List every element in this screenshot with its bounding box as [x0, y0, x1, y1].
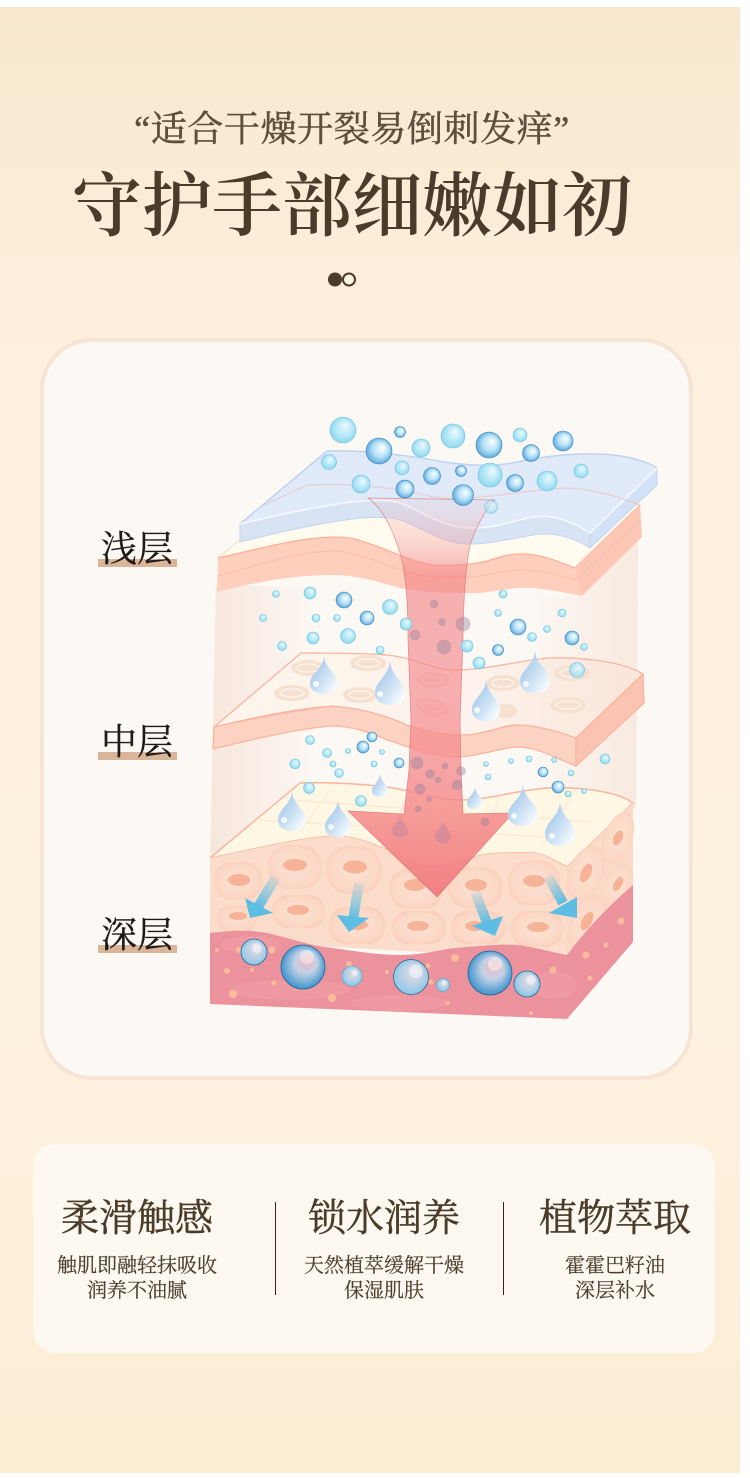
bubbles: dermis: [241, 939, 540, 997]
benefit: lock moisture: 天然植萃缓解干燥: [304, 1254, 464, 1277]
benefit: plant extract: 植物萃取: [539, 1198, 691, 1240]
blue arrows: [245, 876, 577, 936]
benefit: lock moisture: 锁水润养: [308, 1198, 460, 1240]
label: shallow layer: 浅层: [101, 529, 173, 569]
cell wall side: [567, 803, 633, 960]
skin diagram: [210, 417, 657, 1019]
subtitle: “适合干燥开裂易倒刺发痒”: [134, 109, 570, 149]
fading side walls: [210, 540, 638, 862]
middle layer: [213, 653, 644, 766]
bubbles: middle: [260, 587, 588, 678]
benefit: plant extract: 霍霍巴籽油: [565, 1254, 665, 1277]
arrow 3: [472, 892, 503, 936]
pagination dots: [328, 272, 355, 286]
arrow: penetration downward: [348, 498, 513, 897]
divider: [503, 1202, 504, 1295]
shallow layer: [217, 485, 642, 596]
cell wall front: [210, 836, 567, 960]
water droplets: [278, 651, 575, 846]
benefit: soft touch: 润养不油腻: [87, 1279, 187, 1302]
arrow 1: [245, 877, 276, 918]
benefit: soft touch: 触肌即融轻抹吸收: [57, 1254, 217, 1277]
divider: [275, 1202, 276, 1295]
blue moisture film: [240, 451, 657, 548]
cells: [214, 808, 640, 957]
dermis texture: [220, 936, 577, 1011]
benefit: lock moisture: 保湿肌肤: [344, 1279, 424, 1302]
benefit: plant extract: 深层补水: [575, 1279, 655, 1302]
dermis spots: [215, 918, 624, 1015]
benefit: lock moisture: [304, 1198, 464, 1302]
arrow 2: [337, 883, 369, 932]
benefit: soft touch: [57, 1198, 217, 1302]
label: deep layer: 深层: [101, 915, 173, 955]
arrow 4: [548, 876, 577, 918]
title: 守护手部细嫩如初: [72, 169, 632, 246]
bubbles: top: [322, 417, 588, 514]
dermis: [210, 885, 633, 1019]
panel: benefits: [33, 1144, 715, 1353]
label: middle layer: 中层: [101, 722, 173, 762]
surface ovals: [274, 655, 590, 720]
bubbles: lower: [290, 732, 610, 826]
deep layer block: [210, 783, 640, 1019]
panel: skin layers: [42, 340, 691, 1078]
benefit: plant extract: [539, 1198, 691, 1302]
cream surface: [210, 783, 633, 867]
benefit: soft touch: 柔滑触感: [61, 1198, 213, 1240]
